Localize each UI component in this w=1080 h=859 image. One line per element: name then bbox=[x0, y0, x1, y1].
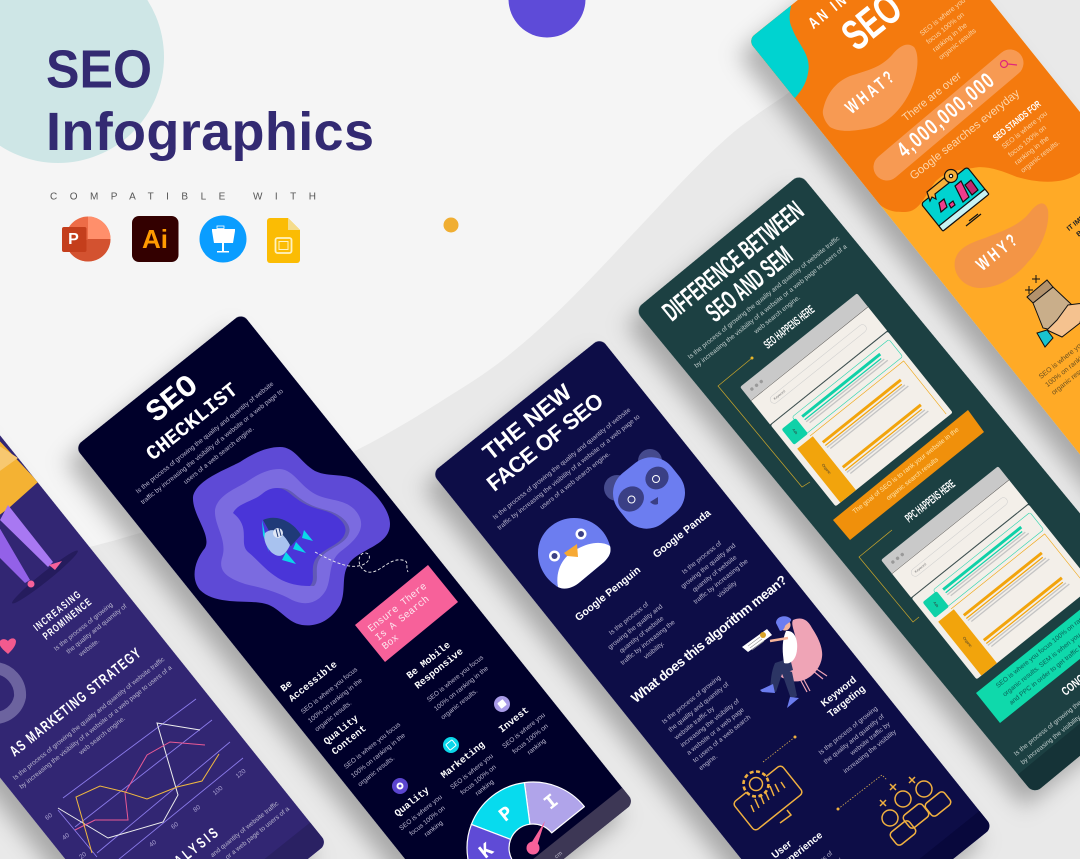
panel: difference between SEO and SEM card bbox=[635, 174, 1080, 794]
text block: penguin body: Is the process of bbox=[608, 601, 650, 637]
checklist item: be mobile responsive bbox=[405, 636, 499, 721]
text block: intro: Is the process of growing the quality and quantity of website traffic bbox=[687, 235, 841, 361]
text block: keyword body: increasing the visibility bbox=[842, 728, 898, 775]
heading: difference between SEO and SEM: SEO AND SEM bbox=[700, 240, 798, 328]
text block: prominence body: website. bbox=[77, 637, 101, 659]
heading: the new face of SEO: FACE OF SEO bbox=[482, 388, 608, 496]
icon: Google Slides bbox=[267, 218, 300, 263]
title bbox=[46, 40, 374, 162]
icon: money bag in hand bbox=[1025, 275, 1080, 347]
icon: Illustrator: Ai bbox=[142, 224, 168, 254]
line chart: 100 bbox=[212, 785, 225, 797]
checklist item: be accessible bbox=[279, 649, 373, 733]
illustration: yellow block with legs bbox=[0, 442, 78, 604]
heading: increasing prominence: INCREASING bbox=[31, 589, 83, 633]
text block: intro: Is the process of growing the quality and quantity of website bbox=[135, 381, 275, 495]
blob: what bbox=[823, 45, 917, 131]
checklist item: quality content: organic results. bbox=[357, 754, 396, 788]
text block: prominence body: Is the process of growing bbox=[53, 601, 114, 653]
connector: SEO bracket bbox=[718, 356, 810, 487]
blob: why bbox=[955, 203, 1048, 288]
checklist item: quality: ranking bbox=[423, 819, 444, 838]
text block: SEO stands for body: focus 100% on bbox=[1007, 124, 1048, 159]
heading: difference between SEO and SEM bbox=[657, 195, 809, 328]
text block: panda body: growing the quality and bbox=[680, 542, 737, 590]
checklist item: quality content: Quality bbox=[322, 713, 361, 747]
stat pill: 4,000,000,000: 4,000,000,000 bbox=[893, 69, 999, 163]
text block: panda body: visibility bbox=[716, 579, 739, 599]
callout: search box: Ensure There bbox=[367, 582, 430, 635]
checklist item: be mobile responsive: organic results. bbox=[440, 687, 479, 721]
illustration: person in chair bbox=[742, 616, 827, 708]
text block: intro: web search engine. bbox=[752, 294, 802, 336]
text block: intro: by increasing the visibility of a website or a web page to users of a bbox=[693, 243, 848, 369]
text block: strategy body: Is the process of growing the quality and quantity of website traffic bbox=[12, 656, 166, 782]
text block: what body: organic results bbox=[938, 27, 978, 61]
blob: what: WHAT? bbox=[842, 68, 898, 118]
checklist item: be mobile responsive: Responsive bbox=[412, 646, 465, 691]
callout: search box: Is A Search bbox=[373, 593, 432, 644]
text block: keyword body: website traffic by bbox=[848, 720, 892, 757]
text block: prominence body: the quality and quantity of bbox=[65, 603, 128, 655]
text block: intro: Is the process of growing the quality and quantity of website bbox=[492, 407, 632, 521]
browser mockup: PPC results: Keyword bbox=[914, 562, 927, 574]
text block: panda body: traffic by increasing the bbox=[692, 557, 750, 605]
browser mockup: SEO results: Keyword bbox=[773, 389, 786, 401]
title: Infographics bbox=[46, 102, 374, 162]
banner: SEO vs SEM summary bbox=[976, 568, 1080, 723]
checklist item: be accessible: Be bbox=[279, 678, 295, 694]
connector: dotted line to monitor bbox=[763, 736, 796, 762]
checklist item: quality content: 100% on ranking in the bbox=[350, 731, 407, 779]
heading: checklist: CHECKLIST bbox=[143, 379, 243, 467]
line chart: 80 bbox=[192, 804, 202, 814]
icon: Google Panda bbox=[602, 447, 696, 539]
icon: PowerPoint bbox=[62, 216, 110, 262]
checklist item: quality: Quality bbox=[393, 785, 432, 819]
text block: keyword body: Is the process of growing bbox=[818, 705, 879, 757]
text block: intro: users of a web search engine. bbox=[182, 425, 255, 485]
heading: the new face of SEO: THE NEW bbox=[478, 379, 577, 465]
heading: an intro to SEO bbox=[809, 0, 900, 49]
text block: SEO stands for body: organic results. bbox=[1020, 139, 1061, 174]
text block: algorithm body: Is the process of growing bbox=[661, 674, 722, 726]
text block: algorithm body: website traffic by bbox=[672, 704, 716, 742]
icon: heart bbox=[0, 638, 16, 654]
checklist item: be accessible: organic results. bbox=[314, 699, 353, 733]
checklist item: quality content: SEO is where you focus bbox=[343, 721, 402, 771]
label: Google Penguin: Google Penguin bbox=[573, 564, 643, 624]
icon: people group bbox=[880, 777, 952, 847]
text block: penguin body: visibility. bbox=[642, 640, 666, 660]
browser mockup: SEO results: Ads bbox=[791, 428, 798, 435]
checklist item: be mobile responsive: SEO is where you focus bbox=[426, 654, 485, 704]
icon: monitor with key bbox=[921, 167, 989, 231]
line chart: 40 bbox=[61, 832, 71, 842]
line chart: 120 bbox=[235, 768, 248, 780]
panel: SEO checklist card bbox=[75, 313, 634, 859]
text block: panda body: quantity of website bbox=[691, 554, 738, 593]
browser mockup: SEO results: Organic bbox=[821, 463, 832, 475]
label: there are over: There are over bbox=[900, 70, 964, 124]
illustration: layered blob with rocket bbox=[193, 447, 408, 625]
checklist item: invest: focus 100% on bbox=[511, 722, 550, 755]
checklist item: quality: focus 100% on bbox=[408, 804, 447, 837]
panel: new face of SEO card bbox=[432, 338, 993, 859]
icon: PowerPoint: P bbox=[68, 231, 79, 248]
text block: analysis body: and quantity of website traffic bbox=[209, 800, 280, 859]
text block: SEO stands for body: ranking in the bbox=[1013, 135, 1051, 166]
browser mockup: PPC results bbox=[881, 466, 1080, 679]
blob: why: WHY? bbox=[973, 231, 1021, 275]
checklist item: be mobile responsive: 100% on ranking in the bbox=[433, 664, 490, 712]
text block: what body: focus 100% on bbox=[925, 11, 966, 46]
icon: rocket bbox=[262, 518, 313, 564]
text block: penguin body: growing the quality and bbox=[607, 603, 664, 651]
checklist item: be accessible: SEO is where you focus bbox=[300, 666, 359, 716]
text block: what body: ranking in the bbox=[931, 22, 969, 53]
text block: penguin body: traffic by increasing the bbox=[619, 618, 677, 666]
label: Google Panda: Google Panda bbox=[651, 507, 713, 561]
checklist item: marketing: ranking bbox=[474, 778, 495, 797]
text block: keyword body: the quality and quantity of bbox=[822, 713, 885, 765]
text block: intro: traffic by increasing the visibility of a website or a web page to bbox=[496, 413, 641, 531]
checklist item: invest: Invest bbox=[497, 705, 531, 735]
heading: as marketing strategy: AS MARKETING STRATEGY bbox=[6, 644, 144, 760]
label: keyword targeting: Targeting bbox=[826, 683, 867, 720]
icon: grey G arc bbox=[0, 668, 20, 718]
connector: dotted line to people bbox=[836, 775, 887, 810]
browser mockup: PPC results: Ads bbox=[932, 601, 939, 608]
panel: orange introduction card bbox=[730, 0, 1080, 529]
connector: PPC bracket bbox=[859, 530, 919, 622]
chart: KPI gauge: I bbox=[540, 790, 564, 816]
icon: monitor with gear bbox=[733, 765, 803, 831]
banner: goal of SEO: organic search results bbox=[885, 455, 940, 502]
label: SEO happens here: SEO HAPPENS HERE bbox=[761, 302, 817, 352]
text block: SEO stands for body: SEO is where you bbox=[1001, 110, 1049, 151]
title: SEO bbox=[46, 40, 152, 100]
banner: goal of SEO bbox=[833, 410, 984, 540]
label: google searches everyday: Google searches everyday bbox=[908, 87, 1022, 182]
heading line two: PROMINENCE bbox=[40, 596, 94, 642]
checklist item: quality content: Content bbox=[329, 723, 368, 757]
browser mockup: SEO results bbox=[740, 293, 953, 506]
text block: penguin body: quantity of website bbox=[618, 615, 665, 654]
icon: Keynote bbox=[200, 216, 246, 262]
heading: SEO stands for: SEO STANDS FOR bbox=[991, 99, 1043, 143]
text block: intro: traffic by increasing the visibility of a website or a web page to bbox=[139, 387, 285, 506]
decorative circle: purple bbox=[508, 0, 586, 38]
label: keyword targeting: Keyword bbox=[819, 675, 859, 709]
checklist item: marketing bbox=[439, 737, 508, 807]
callout: search box bbox=[355, 565, 458, 662]
checklist item: be accessible: 100% on ranking in the bbox=[307, 676, 364, 724]
icon: Illustrator bbox=[132, 216, 178, 262]
heading: SEO: SEO bbox=[140, 369, 206, 431]
checklist item: marketing: Marketing bbox=[439, 739, 487, 781]
text block: algorithm body: a website or a web page bbox=[685, 706, 746, 756]
checklist item: invest: SEO is where you bbox=[501, 712, 547, 750]
checklist item: quality: SEO is where you bbox=[398, 794, 444, 832]
text block: algorithm body: increasing the visibility of bbox=[679, 698, 741, 749]
browser mockup: PPC results: Organic bbox=[962, 636, 973, 648]
checklist item: invest: ranking bbox=[526, 737, 547, 756]
text block: algorithm body: to users of a web search bbox=[691, 713, 752, 764]
checklist item: quality bbox=[392, 778, 457, 848]
checklist item: invest bbox=[494, 696, 560, 766]
checklist item: quality content bbox=[322, 713, 416, 788]
line chart: 60 bbox=[170, 821, 180, 831]
text block: intro: users of a web search engine. bbox=[539, 450, 612, 511]
chart: KPI gauge: P bbox=[495, 802, 519, 828]
line chart bbox=[44, 699, 248, 859]
checklist item: be mobile responsive: Be Mobile bbox=[405, 640, 453, 681]
line chart: 40 bbox=[148, 839, 158, 849]
heading: what does this algorithm mean: What does this algorithm mean? bbox=[628, 572, 790, 706]
label: PPC happens here: PPC HAPPENS HERE bbox=[902, 477, 958, 525]
text block: algorithm body: the quality and quantity of bbox=[667, 681, 730, 733]
orange upper area and teal corner bbox=[730, 0, 1080, 212]
callout: search box: Box bbox=[380, 633, 401, 652]
checklist item: marketing: focus 100% on bbox=[459, 763, 498, 796]
chart: KPI gauge bbox=[467, 782, 584, 859]
panel: purple marketing strategy card bbox=[0, 436, 324, 859]
checklist item: be accessible: Accessible bbox=[286, 659, 339, 704]
dashed flight path bbox=[315, 552, 408, 572]
heading: difference between SEO and SEM: DIFFERENCE BETWEEN bbox=[657, 195, 809, 327]
line chart: 60 bbox=[44, 812, 54, 822]
decorative circle: teal bbox=[0, 0, 164, 163]
banner: goal of SEO: The goal of SEO is to rank your website in the bbox=[851, 426, 961, 516]
compatible with label: COMPATIBLE WITH bbox=[50, 192, 316, 202]
text block: algorithm body: engine. bbox=[698, 753, 719, 772]
text block: panda body: Is the process of bbox=[681, 540, 723, 576]
decorative circle: yellow bbox=[444, 218, 458, 232]
text block: strategy body: by increasing the visibility of a website or a web page to users of a bbox=[18, 664, 173, 790]
text block: strategy body: web search engine. bbox=[77, 715, 127, 757]
icon: Google Penguin bbox=[538, 518, 611, 589]
checklist item: marketing: SEO is where you bbox=[449, 753, 495, 791]
